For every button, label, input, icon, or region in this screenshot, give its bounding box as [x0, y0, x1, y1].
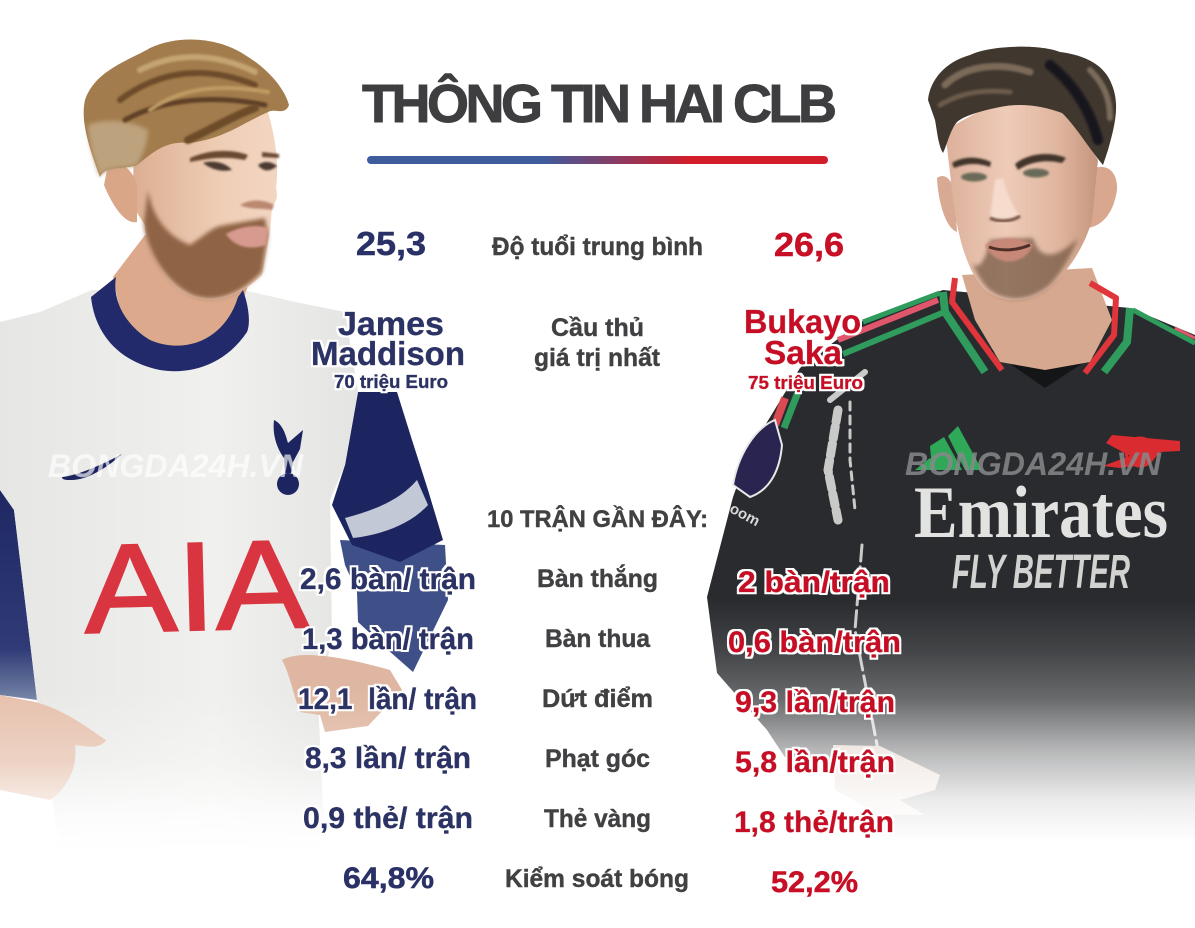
watermark right: BONGDA24H.VN — [905, 446, 1162, 482]
hair — [84, 40, 289, 177]
last 10 matches heading: 10 TRẬN GẦN ĐÂY: — [487, 505, 708, 533]
possession row: 52,2% — [771, 866, 858, 899]
shots row: Dứt điểm — [542, 685, 653, 713]
nose — [990, 178, 1020, 222]
corners row: Phạt góc — [545, 745, 650, 773]
goals scored row: Bàn thắng — [537, 563, 658, 593]
nose shade — [240, 200, 274, 210]
mouth — [985, 238, 1033, 262]
Maddison — [311, 305, 465, 392]
sponsor Emirates: Emirates — [914, 472, 1168, 554]
collar — [943, 278, 1130, 373]
goals conceded row: Bàn thua — [545, 625, 651, 653]
swoosh — [62, 454, 122, 480]
shots row — [298, 683, 895, 719]
forearm sleeve left player — [340, 540, 448, 672]
mouth — [226, 226, 268, 247]
player: Tottenham — [0, 40, 448, 850]
hair highlights — [940, 65, 1110, 140]
side panel — [0, 490, 37, 700]
Maddison: James — [338, 305, 444, 342]
ear — [104, 164, 137, 222]
shirt body — [0, 290, 358, 850]
Tottenham age: 25,3 — [356, 225, 426, 262]
watermark left: BONGDA24H.VN — [48, 448, 304, 484]
Maddison: Maddison — [311, 335, 465, 372]
possession row — [343, 862, 858, 899]
yellow cards row: 1,8 thẻ/trận — [734, 806, 894, 839]
collar — [91, 277, 249, 371]
left hand — [0, 695, 106, 800]
Saka: 75 triệu Euro — [748, 372, 863, 393]
shirt — [707, 290, 1195, 842]
goals scored row: 2 bàn/trận — [738, 566, 890, 599]
shots row: 12,1 lần/ trận — [298, 683, 477, 716]
hair side fade — [88, 121, 148, 177]
possession row: 64,8% — [343, 862, 434, 895]
Saka: Saka — [764, 334, 843, 371]
possession row: Kiểm soát bóng — [505, 865, 689, 893]
player: Arsenal — [707, 47, 1195, 842]
Maddison: 70 triệu Euro — [334, 371, 448, 392]
ears — [937, 176, 957, 232]
corners row — [305, 742, 895, 779]
title rule — [367, 156, 828, 164]
shirt sponsor AIA: AIA — [82, 513, 310, 660]
corners row: 5,8 lần/trận — [735, 746, 895, 779]
crest: cannon — [1103, 435, 1180, 468]
shots row: 9,3 lần/trận — [735, 686, 895, 719]
Saka — [744, 303, 863, 393]
yellow cards row: Thẻ vàng — [544, 805, 651, 833]
goals conceded row — [302, 623, 901, 659]
head — [945, 100, 1098, 300]
yellow cards row — [303, 802, 894, 839]
Saka: Bukayo — [744, 303, 861, 340]
hair — [928, 47, 1116, 165]
fade right player — [700, 600, 1195, 850]
hair strands — [120, 57, 268, 140]
title: THÔNG TIN HAI CLB — [362, 73, 837, 134]
goals conceded row: 0,6 bàn/trận — [728, 626, 901, 659]
armband — [345, 480, 428, 538]
adidas stripes — [915, 426, 982, 470]
fade left player — [0, 690, 440, 850]
sleeve small text: oom — [727, 500, 763, 530]
brows and eyes — [952, 154, 1066, 182]
valuable label — [534, 314, 661, 372]
right hand — [282, 655, 402, 732]
Arsenal age: 26,6 — [774, 226, 844, 263]
shoulder stripes — [775, 293, 1195, 428]
neck — [113, 235, 250, 362]
yellow cards row: 0,9 thẻ/ trận — [303, 802, 473, 835]
undershirt — [990, 350, 1095, 388]
hand — [833, 745, 940, 815]
age label: Độ tuổi trung bình — [492, 233, 703, 261]
neck — [962, 268, 1112, 370]
goals scored row — [300, 563, 890, 599]
valuable label: giá trị nhất — [534, 344, 661, 372]
stubble — [972, 238, 1078, 299]
beard — [144, 190, 268, 298]
sleeve pattern — [828, 372, 878, 750]
valuable label: Cầu thủ — [551, 314, 644, 342]
crest: cockerel — [274, 420, 303, 495]
most valuable player row — [311, 303, 863, 393]
upper sleeve — [332, 392, 443, 562]
head — [132, 112, 277, 300]
premier league badge — [733, 420, 782, 497]
brows and eyes — [190, 151, 279, 171]
goals conceded row: 1,3 bàn/ trận — [302, 623, 474, 656]
corners row: 8,3 lần/ trận — [305, 742, 471, 775]
goals scored row: 2,6 bàn/ trận — [300, 563, 476, 596]
average age row — [356, 225, 844, 263]
